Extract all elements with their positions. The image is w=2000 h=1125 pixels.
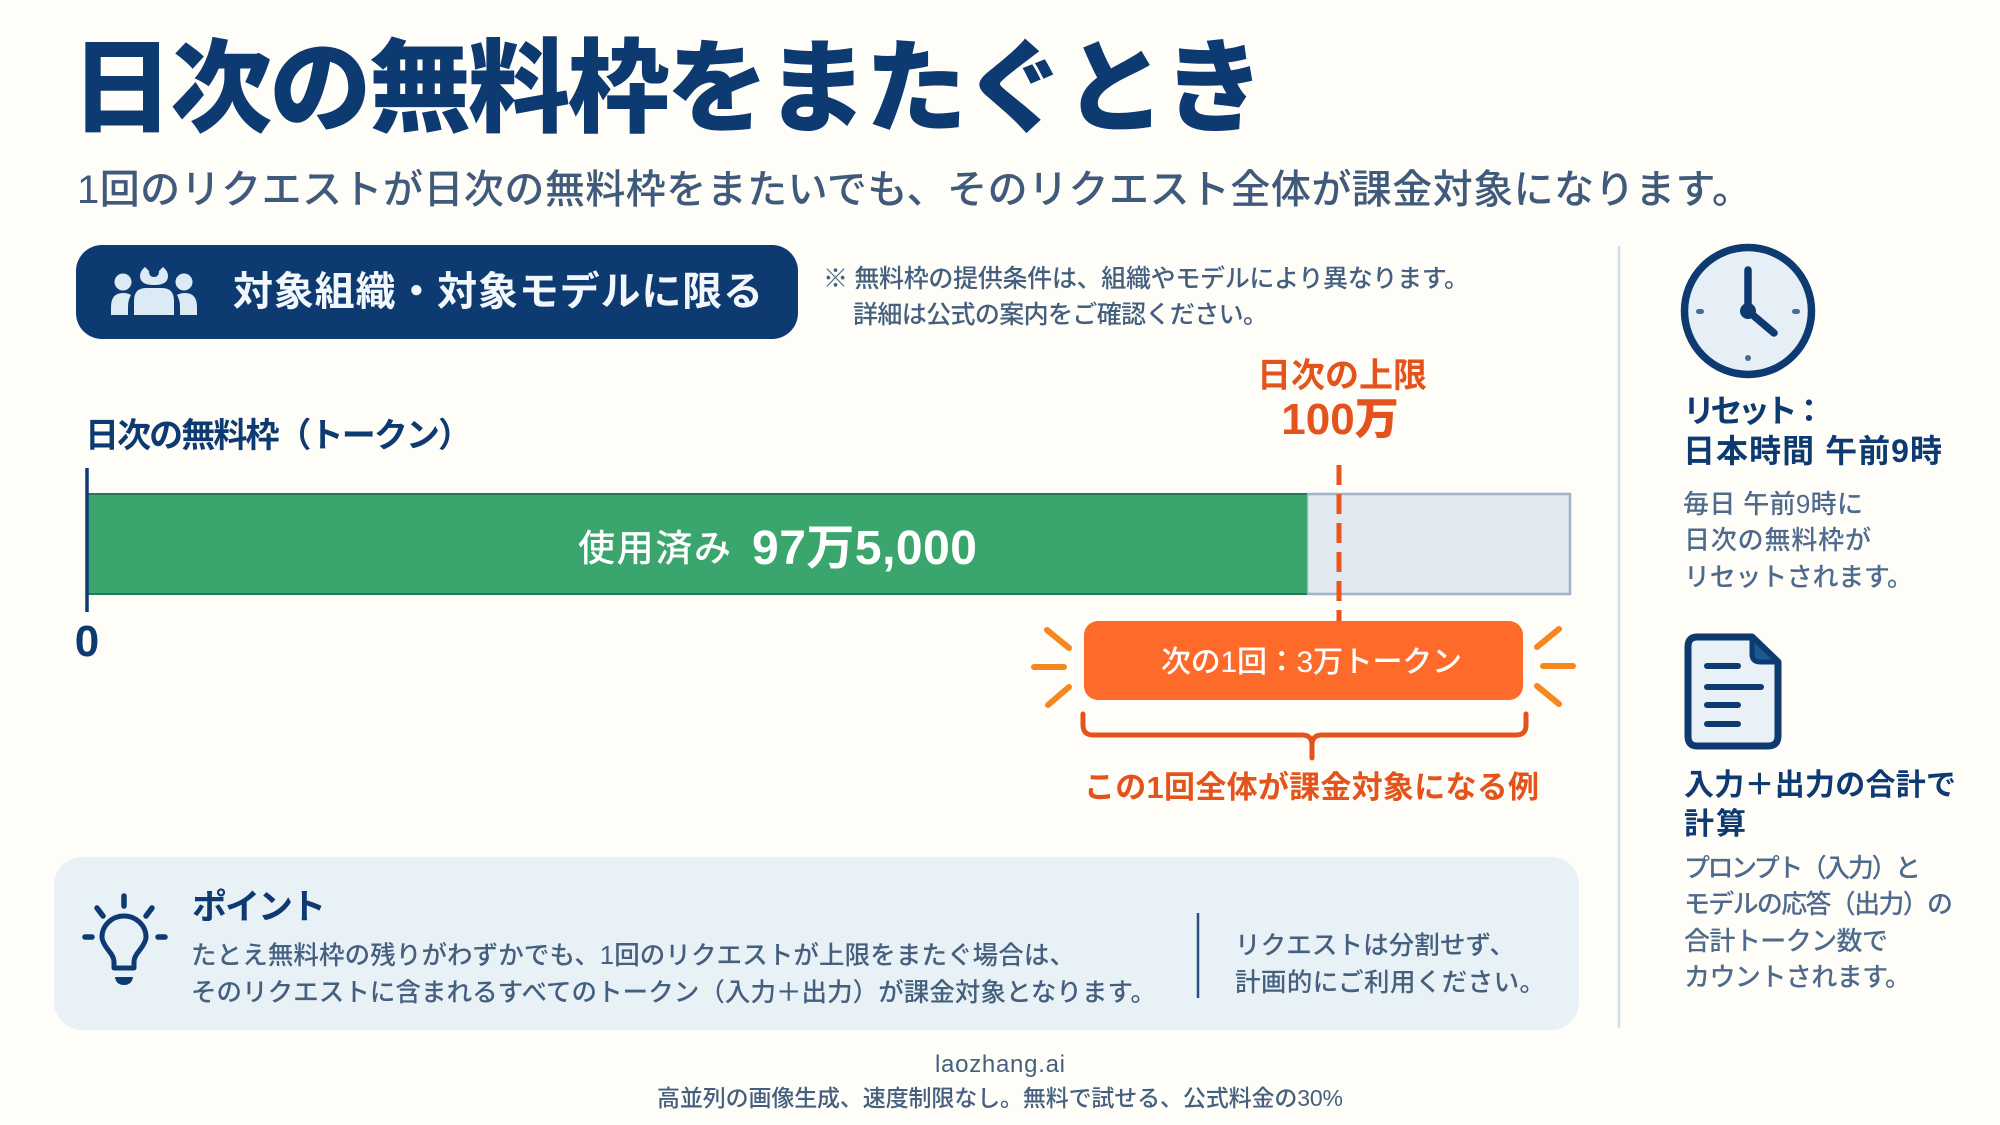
reset heading: リセット： — [1683, 393, 1825, 429]
calculation body — [1684, 853, 1953, 992]
calculation body: モデルの応答（出力）の — [1684, 889, 1953, 919]
footer: 高並列の画像生成、速度制限なし。無料で試せる、公式料金の30% — [657, 1085, 1343, 1111]
point side note: 計画的にご利用ください。 — [1235, 969, 1545, 997]
next request box: 次の1回：3万トークン — [1161, 646, 1462, 679]
note text — [823, 264, 1469, 329]
reset body: リセットされます。 — [1684, 562, 1913, 592]
bracket caption: この1回全体が課金対象になる例 — [1084, 770, 1539, 805]
title: 日次の無料枠をまたぐとき — [71, 32, 1265, 146]
icon: light bulb — [85, 896, 165, 985]
reset heading — [1683, 393, 1942, 469]
token usage bar chart — [75, 468, 1570, 666]
footer: laozhang.ai — [935, 1051, 1065, 1078]
calculation heading: 入力＋出力の合計で — [1684, 769, 1956, 802]
point heading: ポイント — [192, 888, 326, 927]
point body: そのリクエストに含まれるすべてのトークン（入力＋出力）が課金対象となります。 — [191, 979, 1156, 1007]
point body: たとえ無料枠の残りがわずかでも、1回のリクエストが上限をまたぐ場合は、 — [191, 942, 1075, 970]
reset body: 毎日 午前9時に — [1683, 489, 1863, 519]
used label: 使用済み — [578, 528, 731, 569]
badge: eligible organizations and models — [76, 245, 798, 339]
point side note: リクエストは分割せず、 — [1235, 932, 1515, 960]
calculation body: 合計トークン数で — [1684, 926, 1888, 956]
calculation body: プロンプト（入力）と — [1684, 853, 1921, 883]
calculation heading: 計算 — [1684, 808, 1746, 841]
burst rays — [1034, 629, 1573, 705]
reset body: 日次の無料枠が — [1684, 525, 1871, 555]
calculation heading — [1684, 769, 1956, 841]
used segment — [88, 494, 1307, 594]
note text: 詳細は公式の案内をご確認ください。 — [853, 301, 1268, 329]
point body — [191, 942, 1156, 1007]
point side note — [1235, 932, 1545, 997]
reset body — [1683, 489, 1913, 592]
footer — [657, 1051, 1343, 1111]
remaining segment — [1307, 494, 1570, 594]
panel: point — [54, 857, 1579, 1030]
axis zero label: 0 — [75, 617, 99, 666]
next request box — [1084, 621, 1523, 700]
limit label — [1257, 357, 1427, 444]
subtitle: 1回のリクエストが日次の無料枠をまたいでも、そのリクエスト全体が課金対象になります。 — [77, 168, 1752, 212]
chart label: 日次の無料枠（トークン） — [85, 417, 472, 455]
icon: clock — [1684, 248, 1812, 374]
limit dashed line — [1336, 465, 1342, 621]
calculation body: カウントされます。 — [1684, 962, 1911, 992]
icon: people group — [111, 267, 197, 315]
limit label: 100万 — [1281, 395, 1399, 444]
reset heading: 日本時間 午前9時 — [1683, 433, 1942, 469]
bracket — [1083, 714, 1526, 758]
used label — [578, 522, 977, 575]
axis line — [85, 468, 89, 612]
note text: ※ 無料枠の提供条件は、組織やモデルにより異なります。 — [823, 264, 1469, 293]
used label: 97万5,000 — [752, 522, 977, 575]
badge: eligible organizations and models: 対象組織・対象モデルに限る — [233, 269, 763, 314]
icon: document — [1688, 637, 1778, 746]
limit label: 日次の上限 — [1257, 357, 1427, 395]
